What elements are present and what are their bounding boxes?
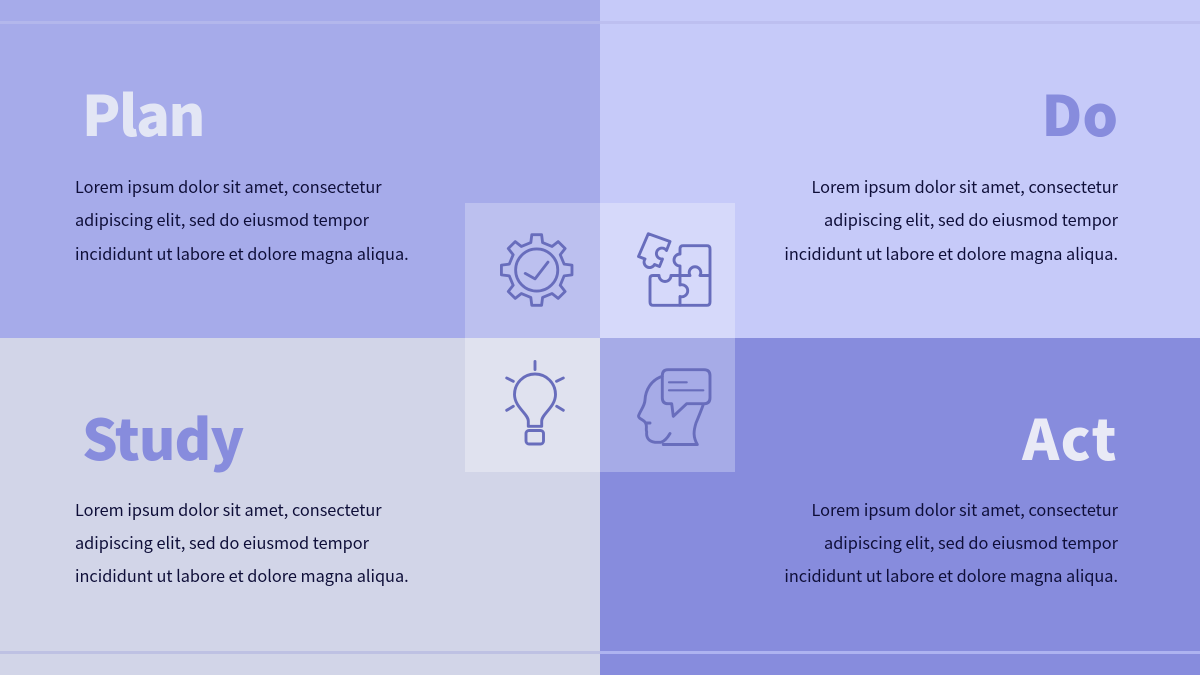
icon: light bulb xyxy=(507,362,563,444)
icon: puzzle pieces xyxy=(638,234,710,305)
text block: act description: incididunt ut labore et dolore magna aliqua. xyxy=(784,563,1118,587)
center tile: study xyxy=(465,338,600,472)
text block: study description xyxy=(75,497,409,587)
panel: study xyxy=(0,338,600,675)
panel: plan xyxy=(0,0,600,338)
icon: head with speech bubble xyxy=(638,370,710,444)
text block: do description: Lorem ipsum dolor sit amet, consectetur xyxy=(811,174,1118,198)
heading: Plan: Plan xyxy=(82,72,204,153)
text block: plan description: incididunt ut labore et dolore magna aliqua. xyxy=(75,240,409,264)
center tile: plan xyxy=(465,203,600,338)
text block: do description xyxy=(784,174,1118,264)
heading: Study: Study xyxy=(82,396,243,477)
panel: act xyxy=(600,338,1200,675)
text block: do description: adipiscing elit, sed do eiusmod tempor xyxy=(824,207,1118,231)
text block: study description: incididunt ut labore et dolore magna aliqua. xyxy=(75,563,409,587)
icon: gear with check xyxy=(501,235,572,305)
text block: study description: adipiscing elit, sed do eiusmod tempor xyxy=(75,530,369,554)
text block: plan description: Lorem ipsum dolor sit amet, consectetur xyxy=(75,174,382,198)
text block: act description xyxy=(784,497,1118,587)
text block: plan description xyxy=(75,174,409,264)
heading: Do: Do xyxy=(1042,72,1118,153)
text block: act description: Lorem ipsum dolor sit amet, consectetur xyxy=(811,497,1118,521)
text block: do description: incididunt ut labore et dolore magna aliqua. xyxy=(784,240,1118,264)
center tile: act xyxy=(600,338,735,472)
panel: do xyxy=(600,0,1200,338)
text block: plan description: adipiscing elit, sed do eiusmod tempor xyxy=(75,207,369,231)
text block: study description: Lorem ipsum dolor sit amet, consectetur xyxy=(75,497,382,521)
heading: Act: Act xyxy=(1022,396,1118,477)
text block: act description: adipiscing elit, sed do eiusmod tempor xyxy=(824,530,1118,554)
center tile: do xyxy=(600,203,735,338)
